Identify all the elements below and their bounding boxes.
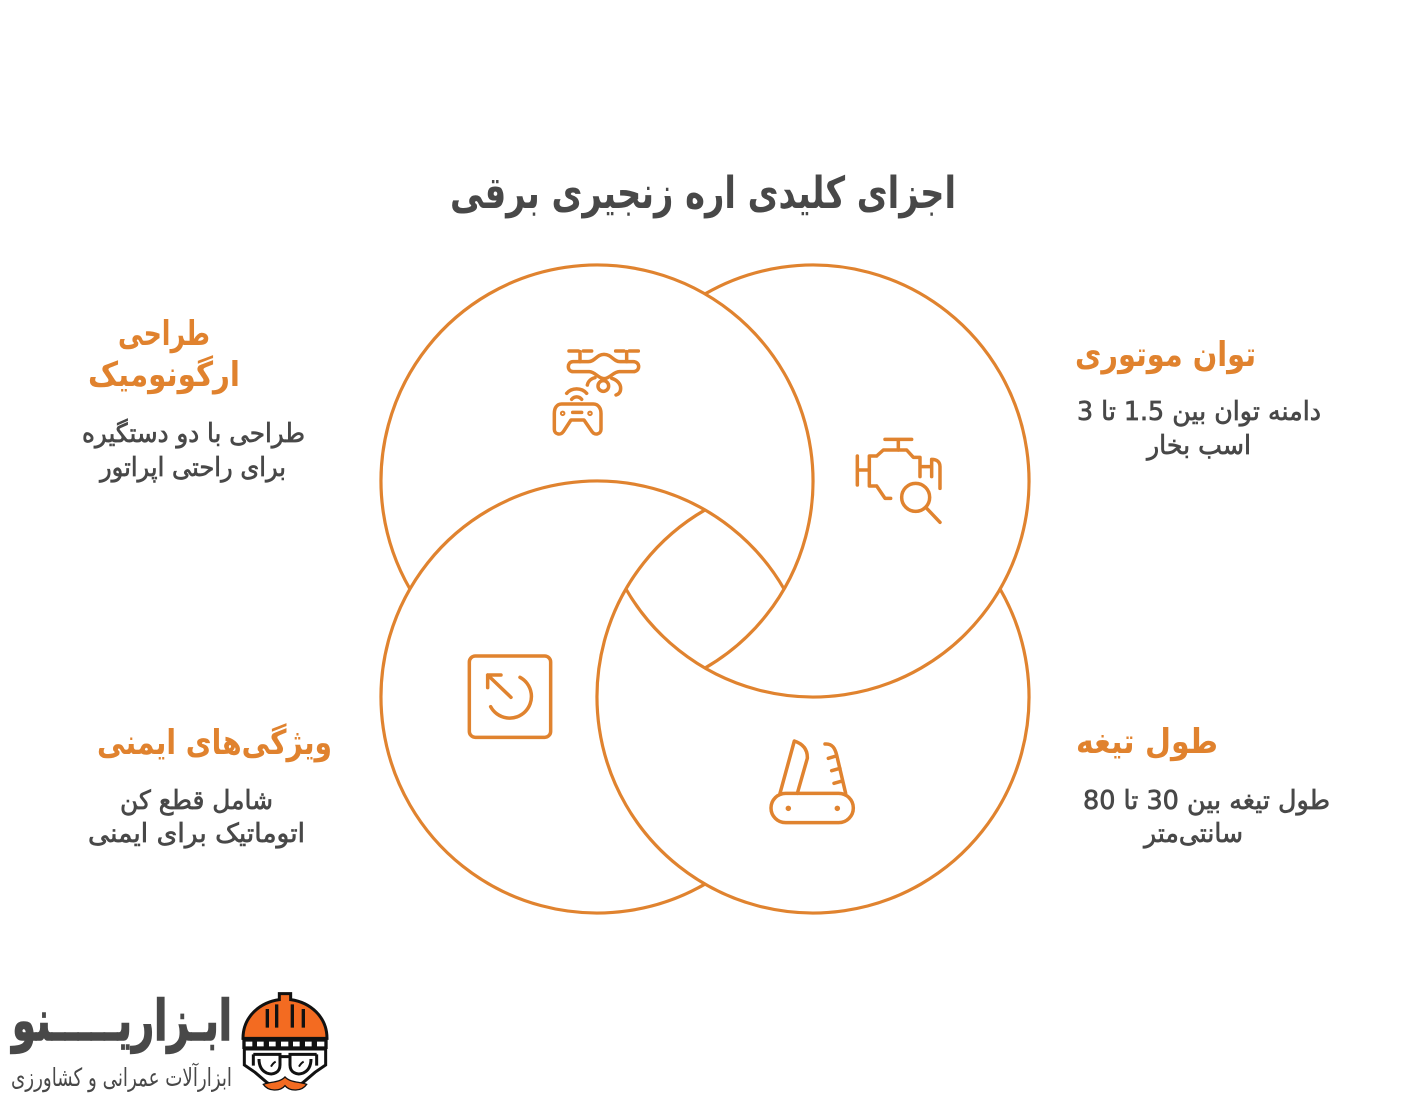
heading: ergonomic design: ارگونومیک — [88, 355, 240, 395]
title: اجزای کلیدی اره زنجیری برقی — [450, 168, 956, 219]
circle arc: bottom right — [597, 510, 1029, 913]
text: motor power description: اسب بخار — [1145, 431, 1251, 461]
heading: ergonomic design: طراحی — [118, 314, 210, 354]
heading: blade length: طول تیغه — [1076, 722, 1218, 762]
text: safety description: اتوماتیک برای ایمنی — [88, 819, 305, 849]
circle arc: top left — [381, 265, 813, 668]
panel: safety features — [88, 723, 332, 849]
panel: ergonomic design — [82, 314, 305, 483]
heading: ergonomic design — [88, 314, 240, 395]
icon: folding multi-tool knife — [771, 741, 853, 823]
icon: engine inspection — [857, 439, 940, 522]
text: blade length description: طول تیغه بین 30 تا 80 — [1083, 786, 1330, 816]
logo: Abzarino — [10, 989, 328, 1093]
panel: motor power — [1075, 335, 1321, 461]
text: ergonomic description: برای راحتی اپراتور — [98, 453, 286, 483]
circle arc: bottom left — [381, 481, 784, 913]
text: blade length description — [1083, 786, 1330, 849]
logo wordmark: ابـزاریـــــنو — [10, 989, 232, 1054]
interlocking circles diagram — [381, 265, 1029, 913]
icon: rotate arrow in square — [469, 656, 551, 737]
heading: motor power: توان موتوری — [1075, 335, 1256, 375]
logo icon: helmet and face — [242, 994, 328, 1090]
text: ergonomic description: طراحی با دو دستگیره — [82, 418, 305, 449]
panel: blade length — [1076, 722, 1330, 849]
heading: safety features: ویژگی‌های ایمنی — [97, 723, 332, 763]
logo tagline: ابزارآلات عمرانی و کشاورزی — [11, 1062, 232, 1093]
circle arc: top right — [626, 265, 1029, 697]
text: motor power description: دامنه توان بین 1.5 تا 3 — [1077, 397, 1321, 427]
text: motor power description — [1077, 397, 1321, 461]
icon: drone and controller — [554, 351, 639, 434]
text: ergonomic description — [82, 418, 305, 483]
text: safety description: شامل قطع کن — [120, 786, 273, 816]
text: blade length description: سانتی‌متر — [1142, 819, 1243, 849]
text: safety description — [88, 786, 305, 849]
